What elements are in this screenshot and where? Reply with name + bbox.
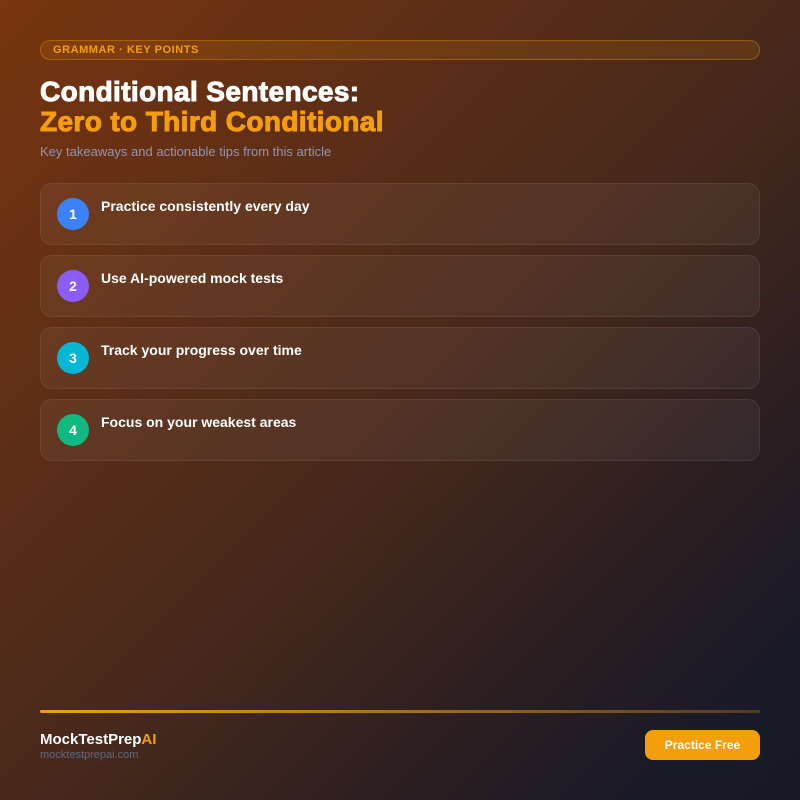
panel: key point 1 — [40, 183, 760, 245]
title: Zero to Third Conditional — [40, 106, 384, 137]
website url: mocktestprepai.com — [40, 749, 138, 761]
icon: number 1: 1 — [69, 206, 77, 222]
brand name: MockTestPrepAI — [40, 731, 156, 748]
icon: number 1 — [57, 198, 89, 230]
text: key point 1: Practice consistently every day — [101, 198, 310, 214]
text: key point 4: Focus on your weakest areas — [101, 414, 296, 430]
panel: key point 3 — [40, 327, 760, 389]
text: key point 3: Track your progress over time — [101, 342, 302, 358]
badge: category label: GRAMMAR · KEY POINTS — [53, 44, 199, 56]
icon: number 3 — [57, 342, 89, 374]
icon: number 2 — [57, 270, 89, 302]
icon: number 4: 4 — [69, 422, 77, 438]
button: call to action — [645, 730, 760, 760]
icon: number 2: 2 — [69, 278, 77, 294]
panel: key point 4 — [40, 399, 760, 461]
icon: number 4 — [57, 414, 89, 446]
panel: key point 2 — [40, 255, 760, 317]
badge: category label — [40, 40, 760, 60]
icon: number 3: 3 — [69, 350, 77, 366]
title — [40, 76, 384, 137]
button: call to action: Practice Free — [665, 738, 740, 752]
text: key point 2: Use AI-powered mock tests — [101, 270, 283, 286]
subtitle: Key takeaways and actionable tips from this article — [40, 144, 331, 159]
title: Conditional Sentences: — [40, 76, 360, 107]
footer accent rule — [40, 710, 760, 713]
